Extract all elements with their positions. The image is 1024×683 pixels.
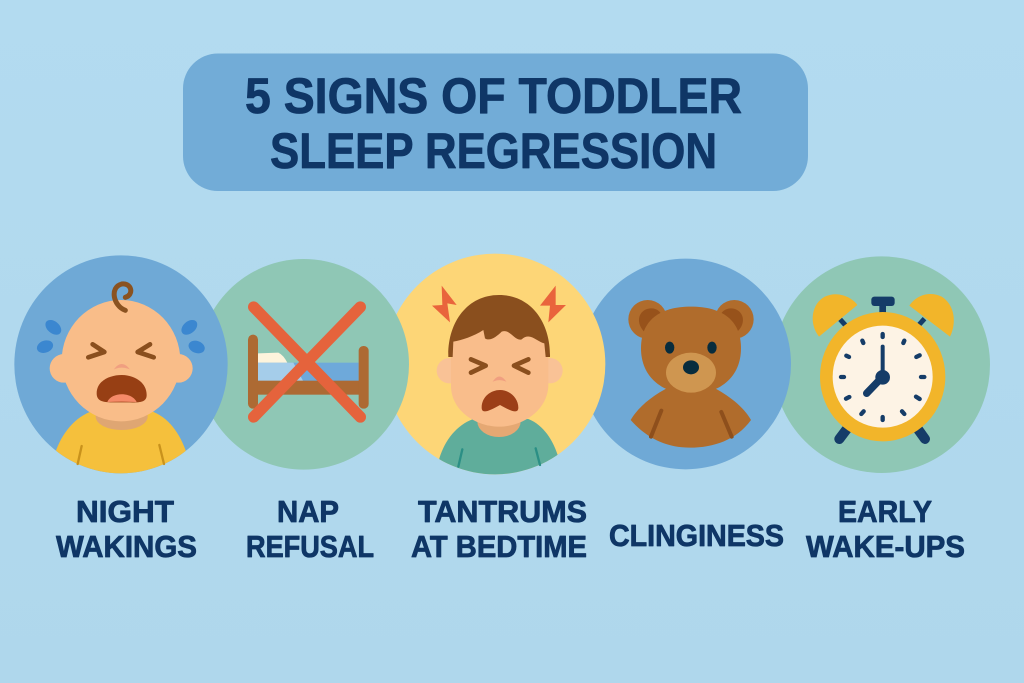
- label: night wakings: [56, 494, 197, 564]
- panel: clinginess icon: [580, 259, 791, 469]
- label: clinginess: CLINGINESS: [609, 518, 784, 553]
- label: tantrums at bedtime: AT BEDTIME: [411, 529, 587, 564]
- title: [245, 68, 742, 179]
- icon: alarm clock: [813, 294, 954, 441]
- label: tantrums at bedtime: [411, 494, 587, 564]
- title: 5 SIGNS OF TODDLER: [245, 68, 742, 124]
- label: early wake-ups: EARLY: [838, 494, 932, 529]
- panel: nap refusal icon: [198, 259, 409, 470]
- title: SLEEP REGRESSION: [270, 123, 717, 179]
- label: nap refusal: [246, 494, 374, 564]
- icon: crying baby: [35, 284, 207, 480]
- icon: teddy bear: [628, 300, 754, 448]
- label: early wake-ups: [806, 494, 965, 564]
- panel: early wake-ups icon: [773, 256, 990, 473]
- label: nap refusal: REFUSAL: [246, 529, 374, 564]
- panel: tantrums icon: [385, 254, 605, 480]
- icon: upset toddler: [432, 286, 566, 480]
- title banner: [183, 54, 808, 191]
- icon: anger bolts: [432, 286, 566, 322]
- label: tantrums at bedtime: TANTRUMS: [418, 494, 587, 529]
- label: nap refusal: NAP: [277, 494, 339, 529]
- icon: bed with cross: [248, 307, 369, 417]
- label: night wakings: WAKINGS: [56, 529, 197, 564]
- panel: night wakings icon: [14, 255, 228, 480]
- label: night wakings: NIGHT: [76, 494, 174, 529]
- label: early wake-ups: WAKE-UPS: [806, 529, 965, 564]
